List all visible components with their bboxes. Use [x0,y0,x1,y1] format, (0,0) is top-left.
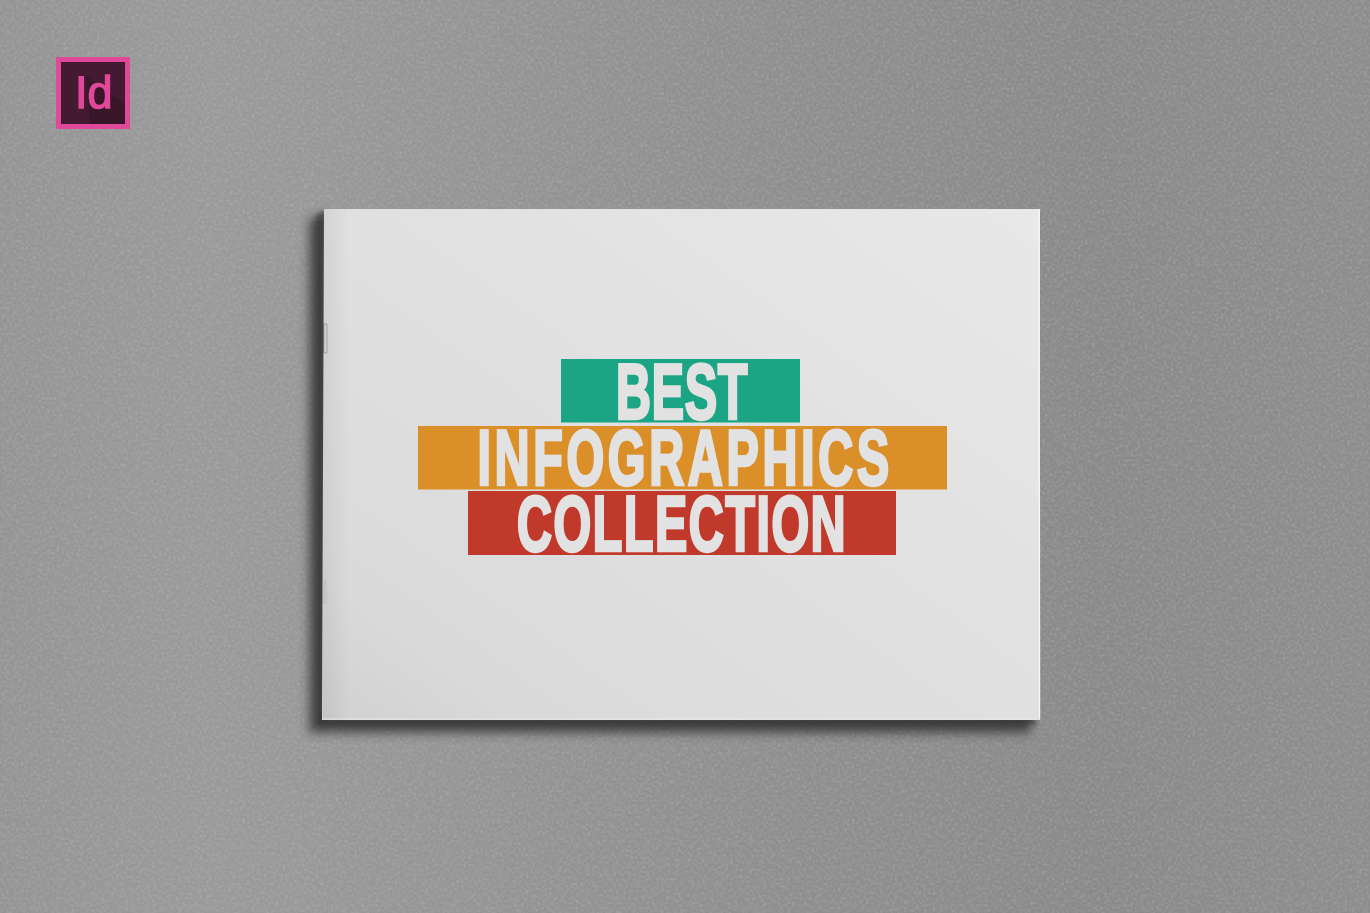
booklet shadow [309,211,1036,733]
staple: upper [324,324,327,353]
icon: InDesign badge [56,57,130,129]
booklet cover [322,209,1040,720]
title bar: infographics: INFOGRAPHICS [478,414,889,501]
title block [418,348,947,567]
title bar: collection: COLLECTION [517,480,846,567]
title bar: best: BEST [616,348,747,435]
icon: InDesign badge: Id [75,67,113,118]
staple: lower [324,580,326,604]
title bar: best [561,348,800,435]
